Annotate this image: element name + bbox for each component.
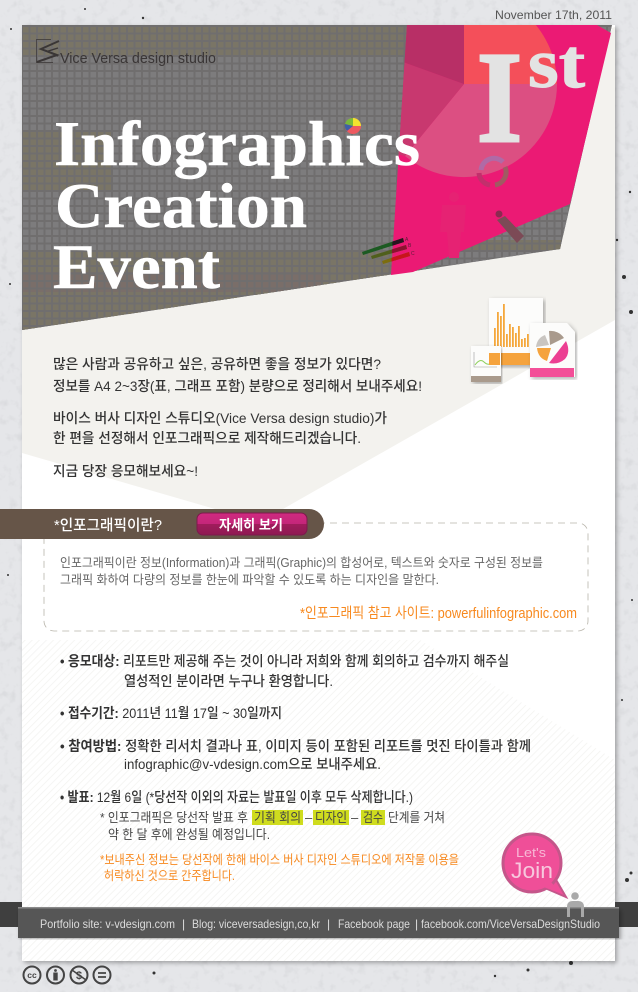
announcement: • 발표: 12월 6일 (*당선작 이외의 자료는 발표일 이후 모두 삭제합니다.) [60,789,413,805]
icon: faint ring chart [479,158,506,185]
creative commons icons [24,966,110,984]
process note: * 인포그래픽은 당선작 발표 후 [100,810,248,825]
section heading: *인포그래픽이란? [54,517,162,534]
let's join speech bubble: Join [511,858,553,883]
icon: attribution [47,966,64,984]
date: November 17th, 2011 [495,8,612,22]
copyright note: 허락하신 것으로 간주합니다. [104,869,235,883]
title [53,109,420,302]
logo wordmark: Vice Versa design studio [60,50,216,67]
entry period: • 접수기간: 2011년 11월 17일 ~ 30일까지 [60,705,282,721]
logo [36,40,216,67]
let's join speech bubble [503,834,566,897]
process note: 단계를 거쳐 [388,810,445,825]
process note: – [351,810,359,825]
1st ranking: st [528,26,585,103]
process note: 약 한 달 후에 완성될 예정입니다. [108,827,270,842]
icon: person [567,892,584,917]
entry method: infographic@v-vdesign.com으로 보내주세요. [124,756,381,772]
footer links: Portfolio site: v-vdesign.com [40,917,175,931]
mini bar chart A B C [362,237,415,264]
icon: line chart document [471,346,501,382]
icon: leaning person [496,210,524,243]
entry target: 열성적인 분이라면 누구나 환영합니다. [124,673,333,689]
footer links: Facebook page [338,917,410,931]
intro text: 바이스 버사 디자인 스튜디오(Vice Versa design studio)가 [53,410,387,426]
footer links: | [415,917,418,931]
title: Infographics [54,109,420,179]
intro text: 지금 당장 응모해보세요~! [53,463,198,479]
section bar [0,509,324,539]
process note [100,810,445,842]
process note: 기획 회의 [254,810,301,825]
title: Creation [55,171,307,241]
process note: – [305,810,313,825]
mini bar chart A B C: C [411,251,415,257]
mini bar chart A B C: B [408,243,412,249]
footer band [0,902,638,938]
1st ranking [477,26,585,170]
footer links [40,917,600,931]
pie chart overlay [398,25,557,178]
icon: non-commercial: $ [76,970,82,982]
icon: small pie over i [345,118,361,134]
process note: 검수 [363,810,383,825]
entry target: • 응모대상: 리포트만 제공해 주는 것이 아니라 저희와 함께 회의하고 검수까지 해주실 [60,653,509,669]
footer links: | [182,917,185,931]
icon: cc: cc [27,970,37,980]
details list [60,653,531,805]
hero panel: grey pixel world map [22,25,622,335]
reference site: *인포그래픽 참고 사이트: powerfulinfographic.com [300,605,577,622]
entry method: • 참여방법: 정확한 리서치 결과나 표, 이미지 등이 포함된 리포트를 멋진 타이틀과 함께 [60,738,531,754]
entry method [60,738,531,772]
intro text [53,356,422,479]
icon: faint standing person [440,192,466,258]
definition text [60,556,543,587]
entry target [60,653,509,689]
intro text: 많은 사람과 공유하고 싶은, 공유하면 좋을 정보가 있다면? [53,356,381,372]
footer links: | [327,917,330,931]
definition text: 인포그래픽이란 정보(Information)과 그래픽(Graphic)의 합성어로, 텍스트와 숫자로 구성된 정보를 [60,556,543,570]
title: Event [53,232,220,302]
icon: no derivatives [94,966,110,984]
let's join speech bubble: Let's [516,845,547,860]
definition text: 그래픽 화하여 다량의 정보를 한눈에 파악할 수 있도록 하는 디자인을 말한다. [60,573,439,587]
button: 자세히 보기 [219,517,283,533]
1st ranking: I [477,26,522,170]
process highlights [252,810,385,825]
copyright note: *보내주신 정보는 당선작에 한해 바이스 버사 디자인 스튜디오에 저작물 이용을 [100,853,459,867]
icon: bar chart document [489,298,543,365]
icon: logo mark [36,40,59,62]
pink panel with pie chart [391,25,611,275]
footer links: Blog: viceversadesign,co,kr [192,917,320,931]
intro text: 정보를 A4 2~3장(표, 그래프 포함) 분량으로 정리해서 보내주세요! [53,378,422,394]
icon: pie chart document [530,323,575,377]
button [197,513,307,535]
footer links: facebook.com/ViceVersaDesignStudio [421,917,600,931]
process note: 디자인 [315,810,347,825]
definition box dashed [44,523,588,631]
copyright note [100,853,459,883]
intro text: 한 편을 선정해서 인포그래픽으로 제작해드리겠습니다. [53,430,361,446]
mini bar chart A B C: A [405,237,409,243]
